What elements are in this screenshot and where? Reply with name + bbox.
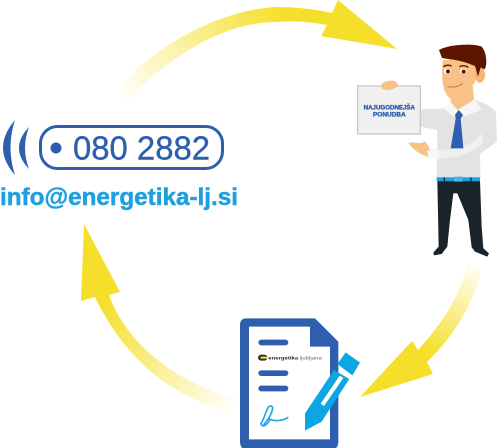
phone number pill [40,126,222,168]
shirt [421,99,497,178]
hair [439,45,486,77]
arrow: top, phone to offer [117,0,397,105]
belt [437,177,480,182]
document frame [240,318,338,448]
man holding offer [358,45,497,257]
collar [443,99,482,117]
text lines [258,340,288,391]
phone number pill: 080 2882 [73,130,210,166]
tie [451,110,463,148]
eyes and brows [443,65,468,74]
document page [249,327,330,439]
arrow: left, contract to phone [81,224,237,412]
hand [408,141,430,157]
smile [447,83,463,87]
shirt cuff [427,150,438,159]
offer sheet: NAJUGODNEJŠA [364,103,416,111]
signature [261,406,288,426]
ear [475,67,485,83]
contract document [240,318,360,448]
icon: sound waves [3,120,29,175]
pen [305,352,360,431]
contact block [0,120,238,211]
thumb [380,80,398,91]
email address: info@energetika-lj.si [0,184,238,211]
shirt sleeve [437,133,483,159]
trousers [433,181,489,257]
logo icon [258,355,267,361]
offer sheet [358,86,420,134]
logo wordmark: energetika ljubljana [268,356,322,362]
offer sheet: PONUDBA [373,113,406,119]
neck and face [442,60,477,110]
arrow: right, offer to contract [360,263,482,397]
